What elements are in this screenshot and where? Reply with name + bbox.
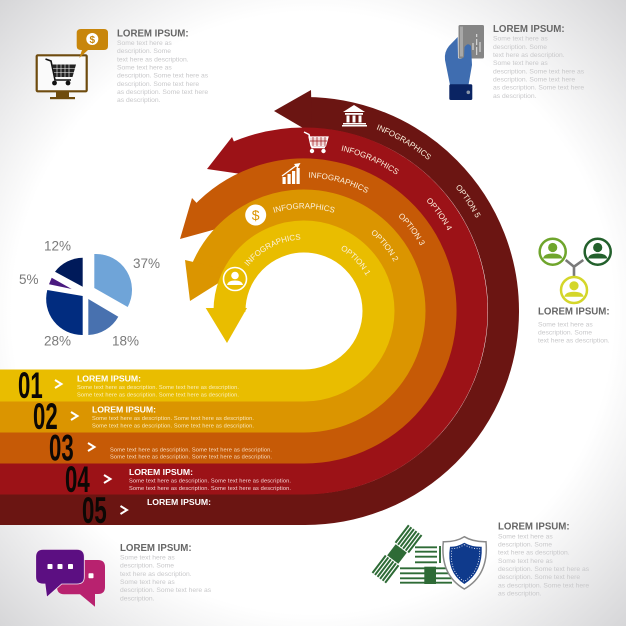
label 12%: 12%: [44, 239, 71, 254]
icon: money and shield: [372, 525, 486, 589]
band list: [18, 365, 291, 531]
option 3 label: OPTION 3: [399, 214, 425, 246]
text block: bottom left: description.: [120, 595, 155, 602]
label 5%: 5%: [19, 272, 39, 287]
text block: top right: description. Some: [493, 44, 547, 51]
band row 01: Some text here as description. Some text here as description.: [77, 392, 239, 398]
money stacks: [400, 546, 452, 584]
arrow band 4: [0, 137, 472, 478]
text block: top right: as description.: [493, 93, 537, 100]
slice 5%: [49, 278, 72, 289]
option 5 label: OPTION 5: [456, 185, 481, 218]
icon: bank on ring 5: [342, 105, 367, 126]
text block: bottom right: Some text here as: [498, 558, 553, 565]
icon: hand holding card: [445, 25, 484, 100]
band row 02: Some text here as description. Some text here as description.: [92, 416, 254, 422]
infographics label 2: INFOGRAPHICS: [273, 203, 335, 213]
band row 03: [49, 428, 272, 469]
text block: top right: text here as description.: [493, 52, 565, 59]
text block: bottom left: description. Some: [120, 563, 174, 570]
text block: bottom left: LOREM IPSUM:: [120, 543, 192, 554]
band row 04: 04: [65, 459, 90, 500]
slice 12%: [55, 258, 83, 287]
icon: network of people: [540, 239, 611, 303]
slice 18%: [88, 299, 118, 335]
text block: top right: as description. Some text here: [493, 85, 584, 92]
text block: top left: [117, 28, 209, 104]
text block: top left: description. Some: [117, 48, 171, 55]
infographics label 5: INFOGRAPHICS: [376, 124, 431, 160]
band row 02: Some text here as description. Some text here as description.: [92, 423, 254, 429]
icon: monitor with cart and dollar bubble: [37, 29, 108, 99]
band row 02: 02: [33, 396, 58, 437]
text block: top left: text here as description.: [117, 56, 189, 63]
text block: bottom left: description. Some text here as: [120, 587, 212, 594]
text block: bottom right: as description.: [498, 590, 542, 598]
infographics label 1: INFOGRAPHICS: [244, 234, 300, 266]
arrow band 3: [0, 174, 441, 447]
icon: person on ring 1: [224, 268, 246, 290]
text block: bottom left: Some text here as: [120, 579, 175, 586]
text block: top right: Some text here as: [493, 60, 548, 67]
band row 05: LOREM IPSUM:: [147, 497, 211, 507]
band row 03: Some text here as description. Some text here as description.: [110, 447, 272, 453]
infographics label 4: INFOGRAPHICS: [342, 145, 399, 174]
shield: [443, 537, 486, 589]
arrow band 5: [0, 90, 504, 510]
option 4 label: OPTION 4: [427, 198, 452, 230]
text block: top left: as description. Some text here: [117, 89, 208, 96]
text block: middle right: LOREM IPSUM:: [538, 306, 610, 318]
icon: cart on ring 4: [304, 132, 328, 153]
option 2 label: OPTION 2: [372, 230, 398, 262]
text block: top left: description. Some text here: [117, 81, 199, 88]
text block: top left: Some text here as: [117, 40, 172, 47]
text block: top left: as description.: [117, 97, 161, 104]
band row 04: Some text here as description. Some text here as description.: [129, 486, 291, 492]
spiral arrow chart: [0, 90, 504, 510]
band row 04: Some text here as description. Some text here as description.: [129, 479, 291, 485]
text block: top right: LOREM IPSUM:: [493, 24, 565, 35]
text block: top right: description. Some text here as: [493, 68, 585, 75]
infographics label 3: INFOGRAPHICS: [309, 172, 368, 193]
icon: speech bubbles: [36, 549, 105, 607]
text block: bottom left: [120, 543, 212, 602]
band row 05: 05: [82, 490, 107, 531]
band row 05: [82, 490, 211, 531]
label 18%: 18%: [112, 334, 139, 349]
text block: top right: [493, 24, 585, 100]
arrow band 2: [0, 206, 409, 416]
text block: middle right: description. Some: [538, 330, 592, 337]
band row 04: [65, 459, 291, 500]
band row 01: Some text here as description. Some text here as description.: [77, 385, 239, 391]
money bundle tilted: [372, 525, 422, 583]
text block: top left: description. Some text here as: [117, 73, 209, 80]
text block: bottom left: text here as description.: [120, 571, 192, 578]
band row 02: [33, 396, 254, 437]
band row 04: LOREM IPSUM:: [129, 467, 193, 477]
label 28%: 28%: [44, 334, 71, 349]
text block: bottom left: Some text here as: [120, 554, 175, 562]
icon: dollar on ring 2: [245, 204, 266, 226]
text block: bottom right: description. Some text here as: [498, 566, 590, 573]
band row 01: 01: [18, 365, 43, 406]
text block: bottom right: description. Some text here: [498, 574, 580, 581]
icon: growth chart on ring 3: [282, 163, 300, 184]
curved labels: [244, 124, 481, 276]
band row 02: LOREM IPSUM:: [92, 404, 156, 414]
text block: bottom right: description. Some: [498, 542, 552, 548]
text block: middle right: [538, 306, 610, 344]
text block: bottom right: [498, 522, 590, 598]
band row 03: Some text here as description. Some text here as description.: [110, 455, 272, 461]
option 1 label: OPTION 1: [342, 246, 370, 276]
text block: top right: description. Some text here: [493, 77, 575, 84]
pie chart: [19, 239, 160, 349]
text block: bottom right: Some text here as: [498, 533, 553, 540]
text block: bottom right: LOREM IPSUM:: [498, 522, 570, 532]
text block: middle right: text here as description.: [538, 337, 610, 344]
band row 03: 03: [49, 428, 74, 469]
arrow band 1: [0, 236, 378, 386]
slice 28%: [46, 290, 83, 335]
label 37%: 37%: [133, 256, 160, 271]
text block: bottom right: as description. Some text here: [498, 582, 589, 589]
band row 01: [18, 365, 239, 406]
slice 37%: [94, 254, 132, 307]
text block: middle right: Some text here as: [538, 322, 593, 329]
icon: monitor with cart and dollar bubble: $: [90, 35, 96, 46]
text block: bottom right: text here as description.: [498, 550, 570, 557]
text block: top left: Some text here as: [117, 64, 172, 72]
text block: top right: Some text here as: [493, 36, 548, 43]
band row 01: LOREM IPSUM:: [77, 374, 141, 384]
icon: dollar on ring 2: $: [252, 207, 260, 223]
text block: top left: LOREM IPSUM:: [117, 28, 189, 40]
